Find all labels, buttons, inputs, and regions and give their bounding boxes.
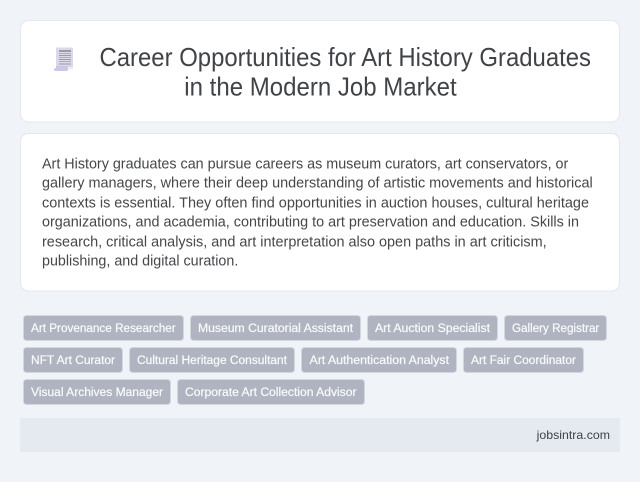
tag: Cultural Heritage Consultant (130, 348, 294, 372)
tag: Art Authentication Analyst: Art Authentication Analyst (310, 353, 450, 367)
text block: career summary: Art History graduates can pursue careers as museum curators, art conservators, or (42, 156, 569, 172)
text block: career summary: research, critical analysis, and art interpretation also open paths in art criticism, (42, 234, 547, 250)
tag: Corporate Art Collection Advisor: Corporate Art Collection Advisor (185, 385, 356, 399)
text block: career summary (42, 156, 593, 269)
tag: Art Fair Coordinator: Art Fair Coordinator (471, 353, 576, 367)
tag: Art Fair Coordinator (464, 348, 584, 372)
tag: Corporate Art Collection Advisor (178, 380, 364, 404)
footer credit: jobsintra.com (536, 428, 610, 442)
panel: description (20, 134, 620, 291)
tag: Art Auction Specialist: Art Auction Specialist (375, 321, 491, 335)
tag: NFT Art Curator (24, 348, 122, 372)
text block: career summary: publishing, and digital curation. (42, 253, 238, 269)
tag: Visual Archives Manager (24, 380, 170, 404)
tag: Visual Archives Manager: Visual Archives Manager (31, 385, 163, 399)
panel: header (20, 20, 620, 122)
tag: Museum Curatorial Assistant: Museum Curatorial Assistant (198, 321, 354, 335)
tag: Cultural Heritage Consultant: Cultural Heritage Consultant (137, 353, 288, 367)
icon: scroll document (54, 47, 73, 71)
title: Career Opportunities for Art History Graduates (100, 44, 591, 72)
text block: career summary: organizations, and academia, contributing to art preservation and education. Skills in (42, 215, 579, 231)
tag: NFT Art Curator: NFT Art Curator (31, 353, 115, 367)
tag: Art Provenance Researcher: Art Provenance Researcher (31, 321, 176, 335)
title: in the Modern Job Market (184, 74, 457, 102)
tag: Gallery Registrar (504, 316, 606, 340)
tag list (24, 316, 606, 404)
tag: Art Authentication Analyst (302, 348, 456, 372)
tag: Museum Curatorial Assistant (190, 316, 360, 340)
footer bar (20, 418, 620, 452)
title (100, 44, 591, 102)
tag: Art Auction Specialist (368, 316, 498, 340)
text block: career summary: contexts is essential. They often find opportunities in auction houses, cultural heritage (42, 195, 589, 211)
tag: Gallery Registrar: Gallery Registrar (512, 321, 599, 335)
text block: career summary: gallery managers, where their deep understanding of artistic movements and historical (42, 176, 593, 192)
tag: Art Provenance Researcher (24, 316, 184, 340)
